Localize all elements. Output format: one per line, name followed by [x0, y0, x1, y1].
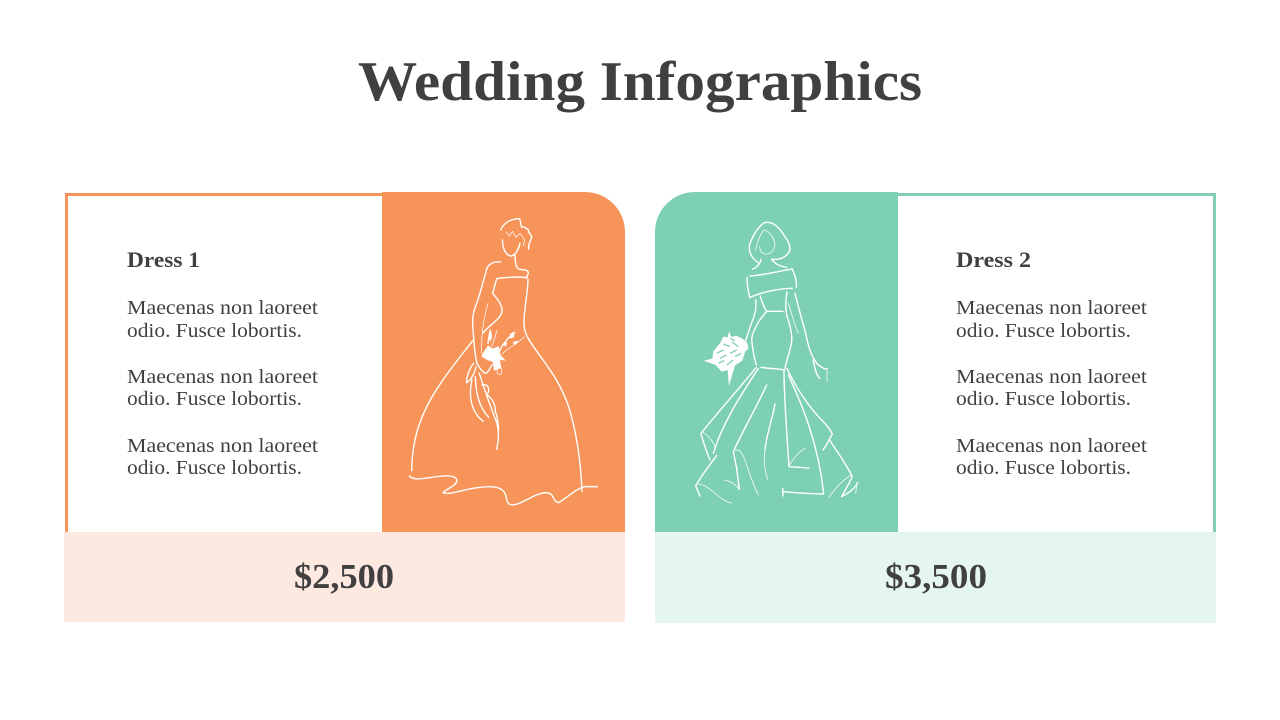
price: dress 1: $2,500	[294, 557, 394, 596]
text block: dress 2 item 3	[956, 435, 1147, 479]
price band: dress 2	[655, 532, 1216, 623]
price band: dress 1	[64, 532, 625, 622]
text block: dress 1 item 3	[127, 435, 318, 479]
icon: bride in mermaid gown with bouquet	[696, 222, 858, 503]
text block: dress 1 item 1: Maecenas non laoreet	[127, 297, 318, 319]
price: dress 2: $3,500	[885, 557, 987, 596]
text block: dress 2 item 1	[956, 297, 1147, 342]
icon: bride in ball gown with bouquet	[409, 219, 597, 505]
text block: dress 1 item 1	[127, 297, 318, 342]
teal illustration block	[655, 192, 898, 532]
text block: dress 2 item 2: odio. Fusce lobortis.	[956, 388, 1131, 410]
text block: dress 2 item 2: Maecenas non laoreet	[956, 366, 1147, 388]
heading: dress 1: Dress 1	[127, 247, 200, 272]
heading: dress 2: Dress 2	[956, 247, 1031, 272]
orange illustration block	[382, 192, 625, 532]
text block: dress 2 item 3: odio. Fusce lobortis.	[956, 457, 1131, 479]
panel frame: dress 1	[66, 194, 382, 532]
text block: dress 1 item 3: Maecenas non laoreet	[127, 435, 318, 457]
text block: dress 1 item 2: Maecenas non laoreet	[127, 366, 318, 388]
panel: dress 1	[64, 192, 625, 622]
text block: dress 1 item 1: odio. Fusce lobortis.	[127, 320, 302, 342]
text block: dress 1 item 3: odio. Fusce lobortis.	[127, 457, 302, 479]
text block: dress 1 item 2	[127, 366, 318, 410]
text block: dress 2 item 3: Maecenas non laoreet	[956, 435, 1147, 457]
panel: dress 2	[655, 192, 1216, 623]
text block: dress 2 item 1: Maecenas non laoreet	[956, 297, 1147, 319]
title: Wedding Infographics	[358, 51, 922, 113]
panel frame: dress 2	[898, 194, 1214, 532]
text block: dress 2 item 2	[956, 366, 1147, 410]
text block: dress 1 item 2: odio. Fusce lobortis.	[127, 388, 302, 410]
text block: dress 2 item 1: odio. Fusce lobortis.	[956, 320, 1131, 342]
